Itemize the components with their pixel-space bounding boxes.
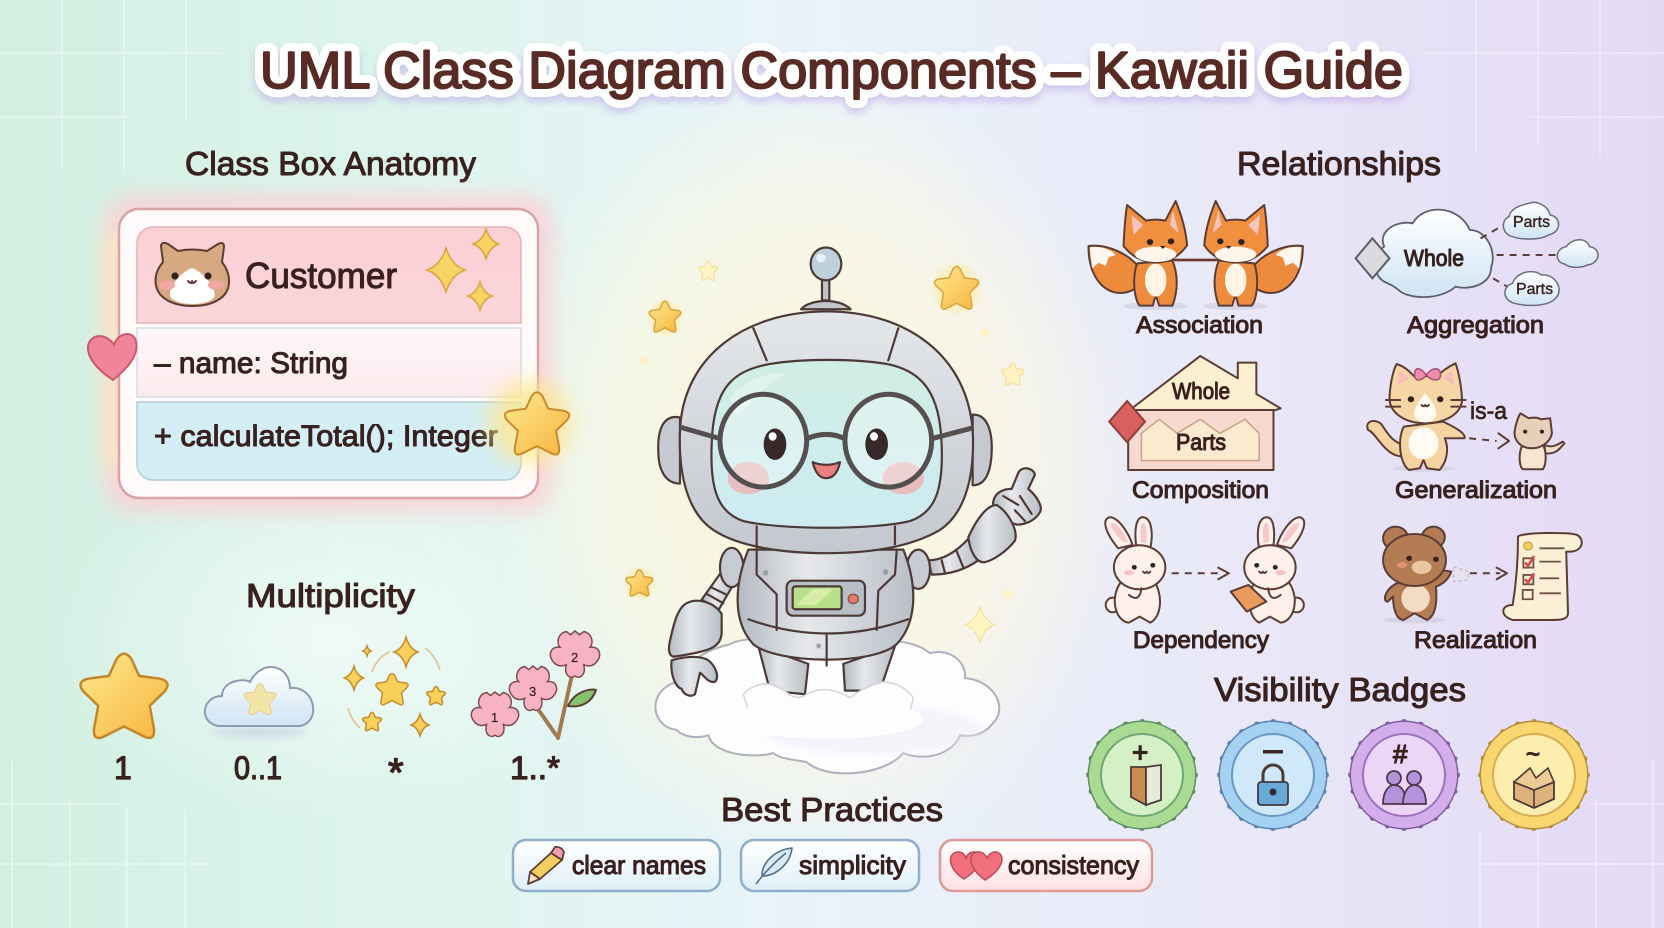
icon: generalization cats	[1367, 363, 1564, 472]
attributes compartment	[137, 328, 521, 397]
icon: aggregation clouds	[1356, 202, 1598, 305]
icon: cat face	[156, 243, 229, 306]
label: 0..1: 0..1	[234, 750, 282, 786]
pill: simplicity: simplicity	[799, 850, 906, 880]
label: Association: Association	[1136, 312, 1263, 339]
robot visor face	[711, 360, 942, 528]
icon: sparkles	[427, 229, 499, 310]
icon: blossom branch	[471, 631, 600, 738]
label: Whole in house: Whole	[1172, 378, 1230, 404]
label: 1..*: 1..*	[510, 750, 560, 786]
title: UML Class Diagram Components – Kawaii Guide	[260, 47, 1403, 105]
methods compartment	[137, 402, 521, 480]
pill: simplicity	[741, 840, 919, 891]
heading: Class Box Anatomy: Class Box Anatomy	[185, 145, 477, 182]
icon: pencil	[528, 847, 564, 884]
icon: single star	[80, 654, 168, 738]
class name: Customer	[245, 255, 397, 296]
pill: consistency	[940, 840, 1152, 891]
chest display panel	[787, 581, 865, 616]
eyes	[764, 429, 888, 460]
pill: clear names	[513, 840, 720, 891]
icon: floating stars	[625, 261, 1024, 642]
badge: public: +	[1132, 737, 1148, 768]
badge: package: ~	[1526, 741, 1540, 768]
label: Composition: Composition	[1132, 477, 1269, 504]
icon: many stars	[344, 637, 445, 736]
label: Parts top: Parts	[1513, 214, 1550, 231]
badge: public	[1089, 722, 1195, 828]
robot legs	[758, 646, 895, 694]
label: 1: 1	[114, 750, 132, 786]
glasses	[680, 394, 972, 487]
heading: Relationships: Relationships	[1237, 145, 1441, 182]
label: Parts in house: Parts	[1176, 429, 1226, 455]
icon: two hearts	[951, 852, 1002, 880]
robot body	[720, 548, 930, 666]
label: Whole: Whole	[1404, 245, 1464, 271]
robot left arm	[669, 569, 735, 696]
cloud	[655, 639, 999, 773]
badge: protected: #	[1393, 739, 1408, 769]
icon: association foxes	[1089, 201, 1303, 310]
icon: blossom branch: 1	[491, 710, 498, 725]
pill: consistency: consistency	[1008, 850, 1139, 880]
multiplicity row	[80, 631, 600, 795]
label: Aggregation: Aggregation	[1407, 312, 1544, 339]
robot mascot with stars	[625, 247, 1041, 773]
badge: protected	[1351, 722, 1457, 828]
heading: Visibility Badges: Visibility Badges	[1214, 671, 1466, 708]
attributes compartment: – name: String	[154, 347, 348, 380]
icon: realization bear and scroll	[1383, 527, 1582, 623]
cloud front puffs	[743, 682, 913, 726]
panel: class box	[88, 194, 572, 513]
badge: private	[1220, 722, 1326, 828]
label: Realization: Realization	[1414, 627, 1537, 654]
label: is-a: is-a	[1470, 398, 1508, 425]
icon: cloud with faded star	[205, 667, 313, 738]
badge: package	[1481, 722, 1587, 828]
icon: dependency bunnies	[1105, 517, 1304, 623]
label: Parts bottom: Parts	[1516, 281, 1553, 298]
cheeks	[728, 462, 924, 494]
relationships grid	[1089, 201, 1598, 654]
icon: blossom branch: 2	[571, 650, 578, 665]
pill: clear names: clear names	[572, 850, 706, 880]
methods compartment: + calculateTotal(); Integer	[154, 420, 498, 453]
icon: composition house	[1109, 356, 1281, 470]
class header compartment	[137, 227, 521, 323]
label: Dependency: Dependency	[1133, 627, 1269, 654]
icon: glowing star	[488, 380, 572, 464]
icon: feather	[756, 848, 792, 884]
label: Generalization: Generalization	[1395, 477, 1557, 504]
title: UML Class Diagram Components – Kawaii Guide	[260, 42, 1403, 100]
icon: blossom branch: 3	[529, 684, 536, 699]
robot head	[658, 247, 992, 553]
heading: Multiplicity: Multiplicity	[246, 577, 416, 614]
label: *: *	[388, 751, 404, 795]
mouth	[813, 462, 840, 478]
icon: heart	[88, 334, 136, 380]
best practices pills	[513, 840, 1152, 891]
robot right arm	[928, 468, 1041, 575]
visibility badges	[1089, 722, 1587, 828]
title: UML Class Diagram Components – Kawaii Guide	[260, 42, 1403, 100]
heading: Best Practices: Best Practices	[721, 791, 943, 828]
